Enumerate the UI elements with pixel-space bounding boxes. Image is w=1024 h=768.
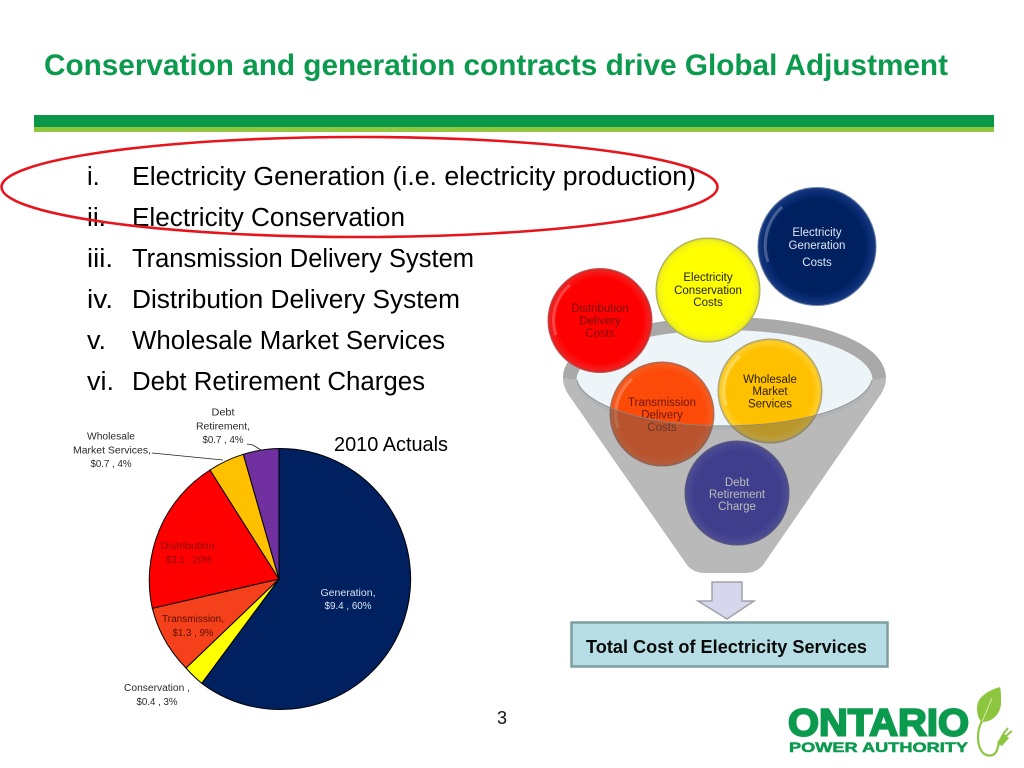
list of electricity cost components: ii. <box>87 204 106 232</box>
pie labels: $0.7 , 4% <box>90 459 132 470</box>
pie labels: Retirement, <box>196 422 250 432</box>
funnel back body <box>563 317 886 573</box>
total cost box: Total Cost of Electricity Services <box>586 637 867 657</box>
circle: debt retirement charge: Debt <box>725 477 750 489</box>
arrow: funnel to total cost <box>698 582 754 619</box>
circle: electricity conservation costs <box>656 238 760 342</box>
pie slices <box>149 448 411 709</box>
circle: wholesale market services <box>718 339 822 443</box>
leader lines <box>152 444 261 460</box>
logo wordmark: POWER AUTHORITY <box>789 739 969 755</box>
logo wordmark: ONTARIO <box>788 702 969 744</box>
circle: distribution delivery costs <box>548 268 652 372</box>
circle: electricity conservation costs: Costs <box>693 297 723 309</box>
circle: wholesale market services: Wholesale <box>743 374 797 386</box>
funnel front translucent body <box>563 378 886 573</box>
circle: transmission delivery costs: Costs <box>647 422 677 434</box>
chart caption: 2010 Actuals <box>334 434 448 456</box>
circle: electricity generation costs: Generation <box>789 240 845 252</box>
circle: distribution delivery costs: Costs <box>585 328 615 340</box>
list of electricity cost components: Distribution Delivery System <box>132 286 460 314</box>
logo: Ontario Power Authority <box>788 687 1012 756</box>
circle: debt retirement charge <box>685 441 789 545</box>
circle: electricity conservation costs: Electricity <box>683 272 733 284</box>
funnel back rim <box>563 317 886 380</box>
pie labels: $0.4 , 3% <box>136 697 178 708</box>
total cost box <box>572 622 888 666</box>
pie labels: Generation, <box>320 588 376 599</box>
circle: electricity generation costs: Electricity <box>792 227 842 239</box>
pie labels: $9.4 , 60% <box>324 601 372 612</box>
pie labels: Conservation , <box>124 683 190 694</box>
funnel opening front edge <box>577 380 872 426</box>
circle: distribution delivery costs: Distribution <box>571 303 629 315</box>
circle: debt retirement charge: Charge <box>718 501 756 513</box>
circle: wholesale market services: Services <box>748 398 792 410</box>
circle: transmission delivery costs: Delivery <box>641 410 683 422</box>
list of electricity cost components: Electricity Conservation <box>132 204 405 232</box>
circle: electricity generation costs: Costs <box>802 257 832 269</box>
circle: electricity generation costs <box>758 188 876 306</box>
pie labels: Wholesale <box>87 432 135 442</box>
circle: transmission delivery costs: Transmission <box>628 397 696 409</box>
pie chart: 2010 actuals <box>73 408 411 709</box>
pie labels <box>73 408 376 708</box>
circle: debt retirement charge: Retirement <box>709 489 766 501</box>
pie labels: $0.7 , 4% <box>202 435 244 446</box>
circle: wholesale market services: Market <box>752 386 788 398</box>
list of electricity cost components: v. <box>87 327 106 355</box>
logo leaf and plug icon <box>977 687 1012 756</box>
header rule <box>34 115 994 132</box>
list of electricity cost components: Electricity Generation (i.e. electricity production) <box>132 163 696 191</box>
list of electricity cost components: Debt Retirement Charges <box>132 368 425 396</box>
list of electricity cost components: i. <box>87 163 100 191</box>
list of electricity cost components <box>87 163 696 396</box>
page number: 3 <box>497 708 507 728</box>
pie labels: Transmission, <box>162 614 224 625</box>
funnel diagram <box>548 188 886 573</box>
pie labels: $1.3 , 9% <box>172 628 214 639</box>
pie labels: Market Services, <box>73 446 151 456</box>
list of electricity cost components: Transmission Delivery System <box>132 245 474 273</box>
pie labels: $3.1 , 20% <box>166 555 212 566</box>
list of electricity cost components: iv. <box>87 286 113 314</box>
red highlight ellipse <box>2 137 718 237</box>
circle: transmission delivery costs <box>610 362 714 466</box>
pie labels: Distribution, <box>160 541 218 552</box>
pie labels: Debt <box>212 408 235 418</box>
circle: distribution delivery costs: Delivery <box>579 316 621 328</box>
list of electricity cost components: Wholesale Market Services <box>132 327 445 355</box>
title: Conservation and generation contracts drive Global Adjustment <box>44 49 948 82</box>
funnel opening <box>576 330 872 430</box>
list of electricity cost components: iii. <box>87 245 113 273</box>
list of electricity cost components: vi. <box>87 368 114 396</box>
circle: electricity conservation costs: Conservation <box>674 285 742 297</box>
